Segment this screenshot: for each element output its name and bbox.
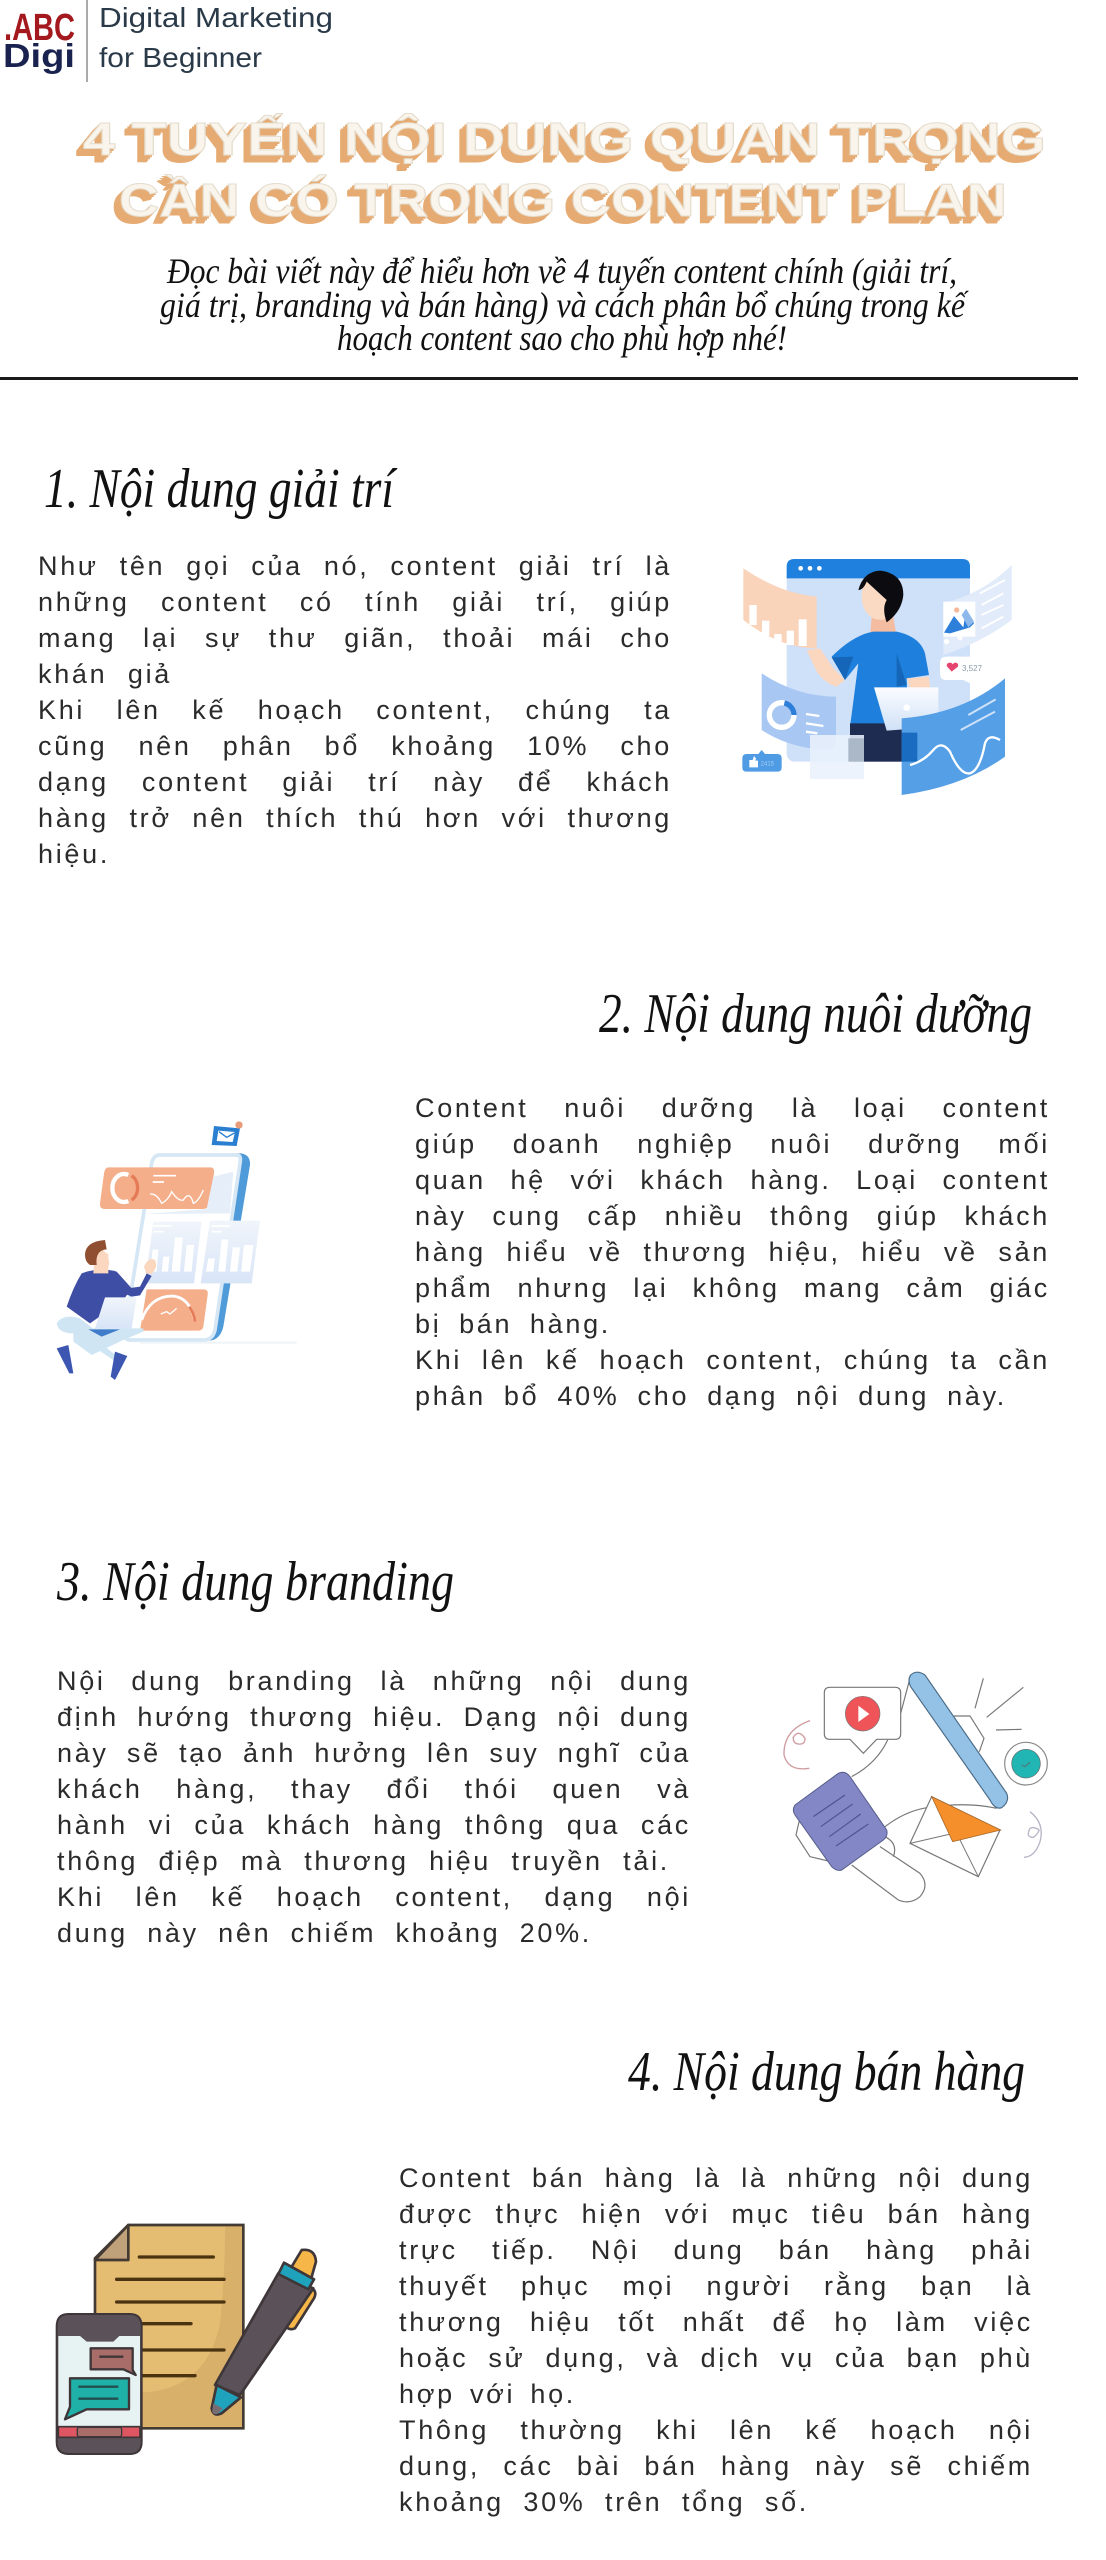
intro text: giá trị, branding và bán hàng) và cách phân bổ chúng trong kế — [160, 285, 969, 325]
body text 4: được thực hiện với mục tiêu bán hàng — [399, 2199, 1033, 2229]
title — [76, 113, 1046, 226]
body text 1: khán giả — [38, 659, 172, 689]
body text 1: cũng nên phân bổ khoảng 10% cho — [38, 731, 672, 761]
intro text: hoạch content sao cho phù hợp nhé! — [337, 318, 787, 358]
body text 2: phẩm nhưng lại không mang cảm giác — [415, 1273, 1050, 1303]
body text 3: định hướng thương hiệu. Dạng nội dung — [57, 1702, 691, 1732]
body text 2: phân bổ 40% cho dạng nội dung này. — [415, 1381, 1007, 1411]
body text 3: Nội dung branding là những nội dung — [57, 1666, 691, 1696]
body text 2: này cung cấp nhiều thông giúp khách — [415, 1201, 1050, 1231]
body text 4: dung, các bài bán hàng này sẽ chiếm — [399, 2451, 1033, 2481]
illustration 3: megaphone with envelope — [783, 1672, 1048, 1902]
heading 4: 4. Nội dung bán hàng — [628, 2041, 1025, 2103]
body text 3: khách hàng, thay đổi thói quen và — [57, 1774, 691, 1804]
illustration 2: man with phone dashboard — [56, 1121, 296, 1380]
body text 1: hiệu. — [38, 839, 110, 869]
title: 4 TUYẾN NỘI DUNG QUAN TRỌNG — [83, 113, 1046, 165]
body text 2: bị bán hàng. — [415, 1309, 611, 1339]
body text 4: hoặc sử dụng, và dịch vụ của bạn phù — [399, 2343, 1033, 2373]
intro text: Đọc bài viết này để hiểu hơn về 4 tuyến content chính (giải trí, — [166, 251, 957, 291]
illustration 1: person with dashboards: 2415 — [761, 762, 775, 768]
body text 1: mang lại sự thư giãn, thoải mái cho — [38, 623, 672, 653]
illustration 4: document, phone and pen — [56, 2224, 318, 2455]
body text 2: giúp doanh nghiệp nuôi dưỡng mối — [415, 1129, 1050, 1159]
body text 3 — [57, 1666, 691, 1948]
body text 4 — [399, 2163, 1033, 2517]
body text 1: hàng trở nên thích thú hơn với thương — [38, 803, 672, 833]
intro text — [160, 251, 969, 358]
body text 3: thông điệp mà thương hiệu truyền tải. — [57, 1846, 670, 1876]
heading 3: 3. Nội dung branding — [56, 1551, 454, 1613]
body text 4: khoảng 30% trên tổng số. — [399, 2487, 809, 2517]
illustration 1: person with dashboards — [742, 559, 1012, 795]
heading 1: 1. Nội dung giải trí — [44, 458, 398, 520]
body text 3: hành vi của khách hàng thông qua các — [57, 1810, 691, 1840]
body text 1: Khi lên kế hoạch content, chúng ta — [38, 695, 672, 725]
body text 4: trực tiếp. Nội dung bán hàng phải — [399, 2235, 1033, 2265]
body text 3: dung này nên chiếm khoảng 20%. — [57, 1918, 592, 1948]
logo: ABC Digi, Digital Marketing for Beginner — [3, 0, 333, 82]
body text 1: những content có tính giải trí, giúp — [38, 587, 672, 617]
logo: ABC Digi, Digital Marketing for Beginner: for Beginner — [99, 42, 262, 73]
body text 4: Content bán hàng là là những nội dung — [399, 2163, 1033, 2193]
body text 3: Khi lên kế hoạch content, dạng nội — [57, 1882, 691, 1912]
logo: ABC Digi, Digital Marketing for Beginner: Digi — [3, 37, 75, 74]
body text 4: Thông thường khi lên kế hoạch nội — [399, 2415, 1033, 2445]
body text 3: này sẽ tạo ảnh hưởng lên suy nghĩ của — [57, 1738, 691, 1768]
body text 4: hợp với họ. — [399, 2379, 576, 2409]
body text 2: hàng hiểu về thương hiệu, hiểu về sản — [415, 1237, 1050, 1267]
body text 2: Khi lên kế hoạch content, chúng ta cần — [415, 1345, 1050, 1375]
illustration 1: person with dashboards: 3,527 — [962, 664, 983, 673]
title: CẦN CÓ TRONG CONTENT PLAN — [119, 174, 1007, 226]
logo: ABC Digi, Digital Marketing for Beginner: Digital Marketing — [99, 2, 333, 33]
body text 1: Như tên gọi của nó, content giải trí là — [38, 551, 672, 581]
body text 2: quan hệ với khách hàng. Loại content — [415, 1165, 1050, 1195]
body text 4: thuyết phục mọi người rằng bạn là — [399, 2271, 1033, 2301]
body text 1 — [38, 551, 672, 869]
logo: ABC Digi, Digital Marketing for Beginner: .ABC — [4, 7, 75, 49]
body text 2 — [415, 1093, 1050, 1411]
body text 2: Content nuôi dưỡng là loại content — [415, 1093, 1050, 1123]
body text 1: dạng content giải trí này để khách — [38, 767, 672, 797]
body text 4: thương hiệu tốt nhất để họ làm việc — [399, 2307, 1033, 2337]
